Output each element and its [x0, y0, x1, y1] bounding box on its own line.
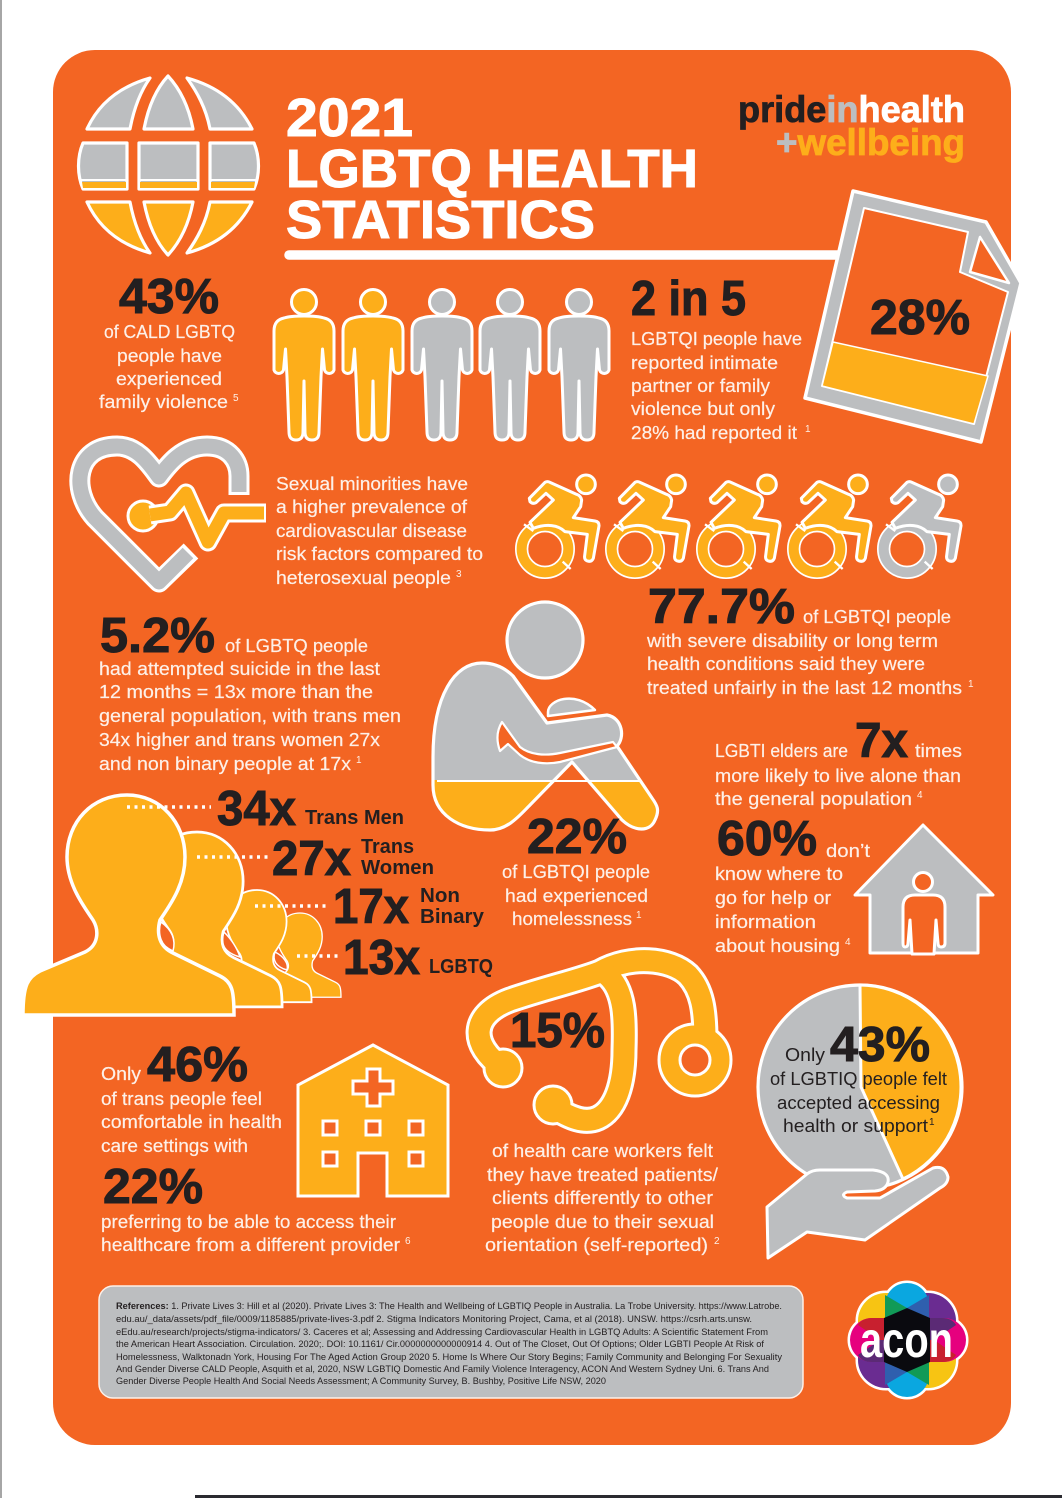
stat: 2 in 5: 2 in 5 — [631, 272, 746, 326]
label: 27x trans women: Women — [361, 857, 434, 879]
panel: references: eEdu.au/research/projects/stigma-indicators/ 3. Caceres et al; Assessing and Addressing Cardiovascular Health in LGBTQ Adults: A Scientific Statement From — [116, 1327, 768, 1338]
title: LGBTQ HEALTH — [286, 139, 698, 199]
stat: 5.2% attempted suicide: general population, with trans men — [99, 705, 401, 726]
icon: row of five people, two highlighted — [274, 290, 609, 440]
stat: 60% housing information — [715, 812, 870, 956]
label: 13x LGBTQ: 13x — [343, 931, 420, 985]
stat: 77.7% disability: with severe disability or long term — [646, 630, 938, 651]
logo: pride in health + wellbeing: prideinhealth — [738, 89, 965, 130]
stat: 60% housing information: know where to — [715, 863, 843, 884]
icon: row of five wheelchair users — [522, 475, 961, 572]
stat: 7x elders live alone: times — [915, 740, 962, 761]
stat: 60% housing information: 60% — [717, 812, 817, 866]
text: cardiovascular disease: Sexual minorities have — [276, 473, 468, 494]
stat: 46% and 22% trans people: healthcare from a different provider — [101, 1234, 400, 1255]
title: STATISTICS — [286, 190, 595, 250]
stat: 43% felt accepted: 43% — [830, 1018, 930, 1072]
stat: 5.2% attempted suicide: 1 — [356, 755, 362, 766]
icon: four shrinking head silhouettes — [23, 795, 341, 1015]
logo: pride in health + wellbeing: +wellbeing — [776, 122, 965, 163]
stat: 15% health care workers: clients differently to other — [492, 1187, 713, 1208]
label: 27x trans women — [272, 832, 434, 886]
stat: 2 in 5: violence but only — [631, 398, 776, 419]
stat: 2 in 5: 28% had reported it — [631, 422, 797, 443]
icon: heart with pulse line — [80, 446, 266, 582]
stat: 43% CALD family violence: experienced — [116, 368, 222, 389]
stat: 77.7% disability — [646, 580, 974, 698]
stat: 7x elders live alone: 7x — [855, 714, 908, 768]
stat: 15% health care workers: people due to their sexual — [491, 1211, 714, 1232]
stat: 5.2% attempted suicide: 34x higher and trans women 27x — [99, 729, 381, 750]
stat: 2 in 5 — [631, 272, 811, 443]
text: cardiovascular disease — [276, 473, 483, 588]
stat: 5.2% attempted suicide: 5.2% — [100, 609, 215, 663]
stat: 7x elders live alone: more likely to live alone than — [715, 765, 961, 786]
stat: 46% and 22% trans people: Only — [101, 1063, 142, 1084]
stat: 7x elders live alone — [715, 714, 962, 809]
label: 17x non binary: Non — [420, 885, 460, 907]
stat: 22% homelessness: 1 — [636, 910, 642, 921]
stat: 43% felt accepted: Only — [785, 1044, 826, 1065]
panel: references: References: 1. Private Lives 3: Hill et al (2020). Private Lives 3: The Health and Wellbeing of LGBTIQ People in Australia. La Trobe University. https://www.Latrobe. — [116, 1301, 782, 1312]
label: 34x trans men: 34x — [217, 782, 296, 836]
stat: 5.2% attempted suicide — [99, 609, 401, 774]
icon: hospital — [298, 1045, 448, 1196]
stat: 60% housing information: go for help or — [715, 887, 831, 908]
stat: 2 in 5: partner or family — [631, 375, 771, 396]
stat: 15% health care workers: they have treated patients/ — [487, 1164, 719, 1185]
title: 2021 — [286, 88, 413, 148]
text: cardiovascular disease: heterosexual people — [276, 567, 451, 588]
stat: 5.2% attempted suicide: of LGBTQ people — [225, 635, 368, 656]
label: 17x non binary: 17x — [333, 880, 409, 934]
title — [286, 88, 698, 250]
stat: 43% felt accepted: accepted accessing — [777, 1092, 940, 1113]
stat: 43% CALD family violence: people have — [117, 345, 222, 366]
stat: 22% homelessness — [502, 810, 650, 929]
stat: 77.7% disability: treated unfairly in the last 12 months — [647, 677, 962, 698]
stat: 7x elders live alone: the general population — [715, 788, 912, 809]
icon: globe — [78, 76, 258, 255]
text: cardiovascular disease: 3 — [456, 569, 462, 580]
stat: 2 in 5: reported intimate — [631, 352, 778, 373]
text: cardiovascular disease: a higher prevalence of — [276, 496, 468, 517]
stat: 43% CALD family violence: 5 — [233, 393, 239, 404]
stat: 77.7% disability: of LGBTQI people — [803, 606, 951, 627]
stat: 15% health care workers: 15% — [510, 1004, 605, 1058]
icon: pie chart held by hand — [758, 985, 962, 1258]
stat: 43% CALD family violence — [99, 270, 239, 412]
stat: 43% CALD family violence: family violence — [99, 391, 228, 412]
icon: house with person — [855, 825, 993, 954]
logo: pride in health + wellbeing — [738, 89, 965, 163]
label: 34x trans men — [217, 782, 404, 836]
stat: 15% health care workers — [485, 1004, 720, 1255]
panel: references: Gender Diverse People Health And Social Needs Assessment; A Community Survey, B. Bushby, Positive Life NSW, 2020 — [116, 1376, 606, 1387]
icon: seated person hugging knees — [433, 602, 658, 830]
stat: 43% felt accepted: 1 — [929, 1117, 935, 1128]
icon: document with 28% — [805, 191, 1021, 442]
panel: references: Homelessness, Walktonadn York, Housing For The Aged Action Group 2020 5. Home Is Where Our Story Begins; Family Community and Belonging For Sexuality — [116, 1352, 782, 1363]
text: cardiovascular disease: risk factors compared to — [276, 543, 483, 564]
stat: 5.2% attempted suicide: 12 months = 13x more than the — [99, 681, 373, 702]
stat: 77.7% disability: 77.7% — [648, 580, 795, 634]
label: 13x LGBTQ — [343, 931, 493, 985]
stat: 46% and 22% trans people: care settings with — [101, 1135, 248, 1156]
stat: 22% homelessness: 22% — [527, 810, 627, 864]
label: 13x LGBTQ: LGBTQ — [429, 956, 493, 978]
stat: 46% and 22% trans people: comfortable in health — [101, 1111, 282, 1132]
stat: 46% and 22% trans people: preferring to be able to access their — [101, 1211, 396, 1232]
panel: references: And Gender Diverse CALD People, Asquith et al, 2020, NSW LGBTIQ Domestic And Family Violence Interagency, ACON And Western Sydney Uni. 6. Trans And — [116, 1364, 769, 1375]
logo: ACON — [850, 1283, 966, 1397]
stat: 15% health care workers: orientation (self-reported) — [485, 1234, 708, 1255]
stat: 46% and 22% trans people: 6 — [405, 1236, 411, 1247]
stat: 43% felt accepted — [770, 1018, 947, 1136]
stat: 46% and 22% trans people: of trans people feel — [101, 1088, 262, 1109]
stat: 60% housing information: information — [715, 911, 816, 932]
title rule — [289, 250, 850, 260]
panel: references: the American Heart Association. Circulation. 2020;. DOI: 10.1161/ Cir.0000000000000914 4. Out of The Closet, Out Of Options; Older LGBTI People At Risk of — [116, 1339, 764, 1350]
panel: references — [99, 1286, 803, 1398]
label: 17x non binary: Binary — [420, 906, 485, 928]
stat: 43% CALD family violence: 43% — [119, 270, 219, 324]
stat: 60% housing information: don’t — [826, 840, 870, 861]
stat: 2 in 5: 1 — [805, 424, 811, 435]
stat: 5.2% attempted suicide: had attempted suicide in the last — [99, 658, 380, 679]
stat: 46% and 22% trans people: 22% — [103, 1160, 203, 1214]
stat: 43% felt accepted: health or support — [783, 1115, 928, 1136]
stat: 43% CALD family violence: of CALD LGBTQ — [104, 321, 235, 342]
stat: 15% health care workers: 2 — [714, 1236, 720, 1247]
dotted leader lines — [127, 807, 338, 956]
stat: 60% housing information: 4 — [845, 937, 851, 948]
stat: 77.7% disability: health conditions said they were — [647, 653, 925, 674]
stat: 7x elders live alone: 4 — [917, 790, 923, 801]
stat: 43% felt accepted: of LGBTIQ people felt — [770, 1068, 947, 1089]
stat: 2 in 5: LGBTQI people have — [631, 328, 802, 349]
stat: 7x elders live alone: LGBTI elders are — [715, 740, 848, 761]
text: cardiovascular disease: cardiovascular disease — [276, 520, 467, 541]
stat: 15% health care workers: of health care workers felt — [492, 1140, 713, 1161]
label: 27x trans women: Trans — [361, 836, 414, 858]
label: 34x trans men: Trans Men — [305, 807, 404, 829]
stat: 22% homelessness: homelessness — [512, 908, 632, 929]
stat: 5.2% attempted suicide: and non binary people at 17x — [99, 753, 352, 774]
stat: 60% housing information: about housing — [715, 935, 840, 956]
icon: document with 28%: 28% — [870, 291, 970, 345]
icon: stethoscope — [479, 961, 731, 1124]
stat: 22% homelessness: of LGBTQI people — [502, 861, 650, 882]
panel: references: edu.au/_data/assets/pdf_file/0009/1185885/private-lives-3.pdf 2. Stigma Indicators Monitoring Project, Cama, et al (2018). UNSW. https://csrh.arts.unsw. — [116, 1314, 752, 1325]
label: 17x non binary — [333, 880, 485, 934]
label: 27x trans women: 27x — [272, 832, 351, 886]
stat: 22% homelessness: had experienced — [505, 885, 648, 906]
logo: ACON: acon — [860, 1312, 953, 1368]
stat: 46% and 22% trans people — [101, 1038, 411, 1255]
stat: 77.7% disability: 1 — [968, 679, 974, 690]
stat: 46% and 22% trans people: 46% — [147, 1038, 248, 1092]
